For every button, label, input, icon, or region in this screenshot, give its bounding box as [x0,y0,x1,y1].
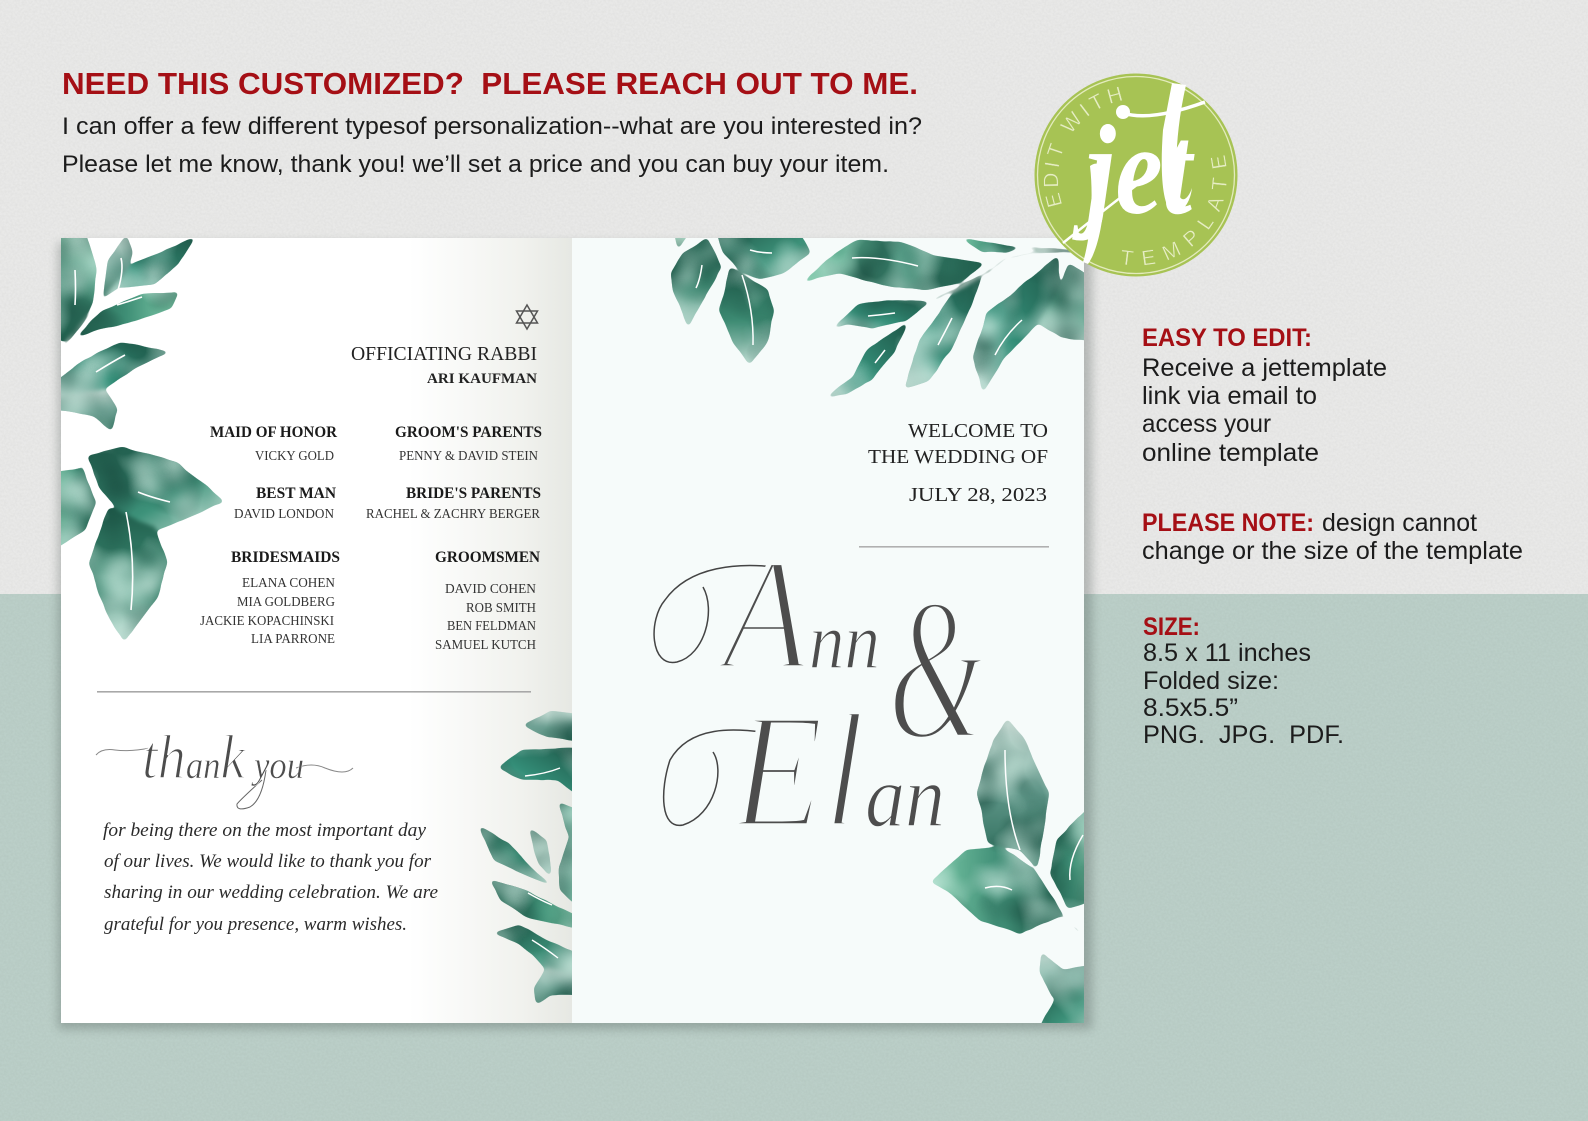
wedding party names right column: RACHEL & ZACHRY BERGER [366,507,541,522]
wedding party names right column: GROOM'S PARENTS [395,424,542,441]
paper background: upper grey band [0,0,1588,594]
side note: size: 8.5x5.5” [1143,694,1238,722]
side note: easy to edit: online template [1142,439,1319,467]
officiating rabbi text [351,343,537,387]
wedding party names right column: DAVID COHEN [445,582,536,597]
side note: size: SIZE: [1143,613,1200,641]
side note: size: PNG. JPG. PDF. [1143,721,1344,749]
wedding party names left column: DAVID LONDON [234,507,334,522]
couple names in script: Ann [714,525,880,703]
leaves: lower right cluster [480,711,572,1003]
paper background: lower sage band [0,594,1588,1121]
headline: NEED THIS CUSTOMIZED? PLEASE REACH OUT TO ME. [62,66,918,101]
badge wordmark [1063,83,1205,264]
side note: size: 8.5 x 11 inches [1143,639,1311,667]
wedding party names left column: MAID OF HONOR [210,424,337,441]
thank you message: of our lives. We would like to thank you for [104,851,432,872]
wedding party names right column: PENNY & DAVID STEIN [399,449,538,464]
couple names in script: & [888,556,986,783]
side note: easy to edit: EASY TO EDIT: [1142,324,1312,352]
side note: easy to edit: link via email to [1142,382,1317,410]
wedding party names right column: BRIDE'S PARENTS [406,485,541,502]
leaves: top cluster [671,228,1095,398]
welcome text: WELCOME TO [908,420,1048,442]
side note: easy to edit: Receive a jettemplate [1142,354,1387,382]
leaves: bottom right cluster [932,720,1084,1023]
thank you script heading [96,724,353,809]
thank you script heading: thank you [142,724,304,792]
wedding party names left column: BEST MAN [256,485,336,502]
couple names in script: Elan [730,679,945,862]
officiating rabbi text: OFFICIATING RABBI [351,343,537,365]
wedding party names right column [366,424,542,653]
intro text block: Please let me know, thank you! we’ll set a price and you can buy your item. [62,151,889,178]
side note: size [1143,613,1344,749]
wedding party names right column: SAMUEL KUTCH [435,638,536,653]
brochure card shadow [58,243,1092,1029]
badge ring text: TEMPLATE [1122,155,1226,265]
officiating rabbi text: ARI KAUFMAN [427,371,537,387]
thank you message: sharing in our wedding celebration. We are [104,882,438,903]
thank you message: for being there on the most important day [103,820,427,841]
panel: brochure inside left page [50,228,585,1023]
wedding party names left column: LIA PARRONE [251,632,335,647]
side note: please note [1142,509,1523,565]
wedding party names left column: VICKY GOLD [255,449,334,464]
thank you message: grateful for you presence, warm wishes. [104,914,407,935]
welcome text: JULY 28, 2023 [909,484,1047,506]
couple names in script [654,525,986,862]
star of David icon [516,305,538,329]
wedding party names right column: ROB SMITH [466,601,536,616]
side note: please note: design cannot [1322,509,1477,537]
badge ring text [1044,86,1226,265]
side note: please note: change or the size of the template [1142,537,1523,565]
wedding party names left column: ELANA COHEN [242,576,335,591]
wedding party names left column: BRIDESMAIDS [231,549,340,566]
wedding party names left column [200,424,340,647]
wedding party names left column: MIA GOLDBERG [237,595,335,610]
thank you message [103,820,438,935]
wedding party names right column: BEN FELDMAN [447,619,536,634]
badge ring text: EDIT WITH [1044,86,1122,207]
wedding party names right column: GROOMSMEN [435,549,540,566]
leaves: upper left cluster [61,238,222,640]
intro text block [62,113,922,178]
welcome text: THE WEDDING OF [868,446,1048,468]
side note: please note: PLEASE NOTE: [1142,509,1314,537]
logo badge: edit with jet template [1034,74,1238,276]
side note: easy to edit [1142,324,1387,467]
side note: size: Folded size: [1143,667,1279,695]
panel: brochure front cover [572,228,1095,1035]
side note: easy to edit: access your [1142,410,1271,438]
intro text block: I can offer a few different typesof personalization--what are you interested in? [62,113,922,140]
wedding party names left column: JACKIE KOPACHINSKI [200,614,334,629]
badge wordmark: jet [1072,99,1195,241]
welcome text [868,420,1048,506]
